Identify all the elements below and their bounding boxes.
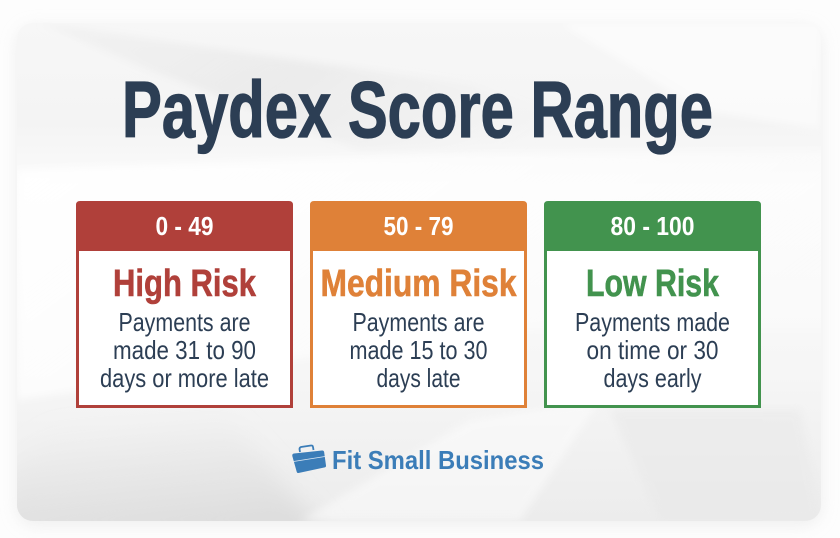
description [100,307,269,393]
description [575,307,730,393]
range header: 0 - 49 [76,201,293,251]
description: days or more late [100,363,269,393]
icon: briefcase [292,445,326,473]
description: made 15 to 30 [350,335,488,365]
logo: Fit Small Business [292,445,544,475]
heading: Medium Risk: Medium Risk [320,263,517,305]
description: days late [376,363,460,393]
range header: 50 - 79: 50 - 79 [384,211,454,241]
description: Payments are [118,307,250,337]
range header: 80 - 100: 80 - 100 [610,211,694,241]
panel: medium risk card [310,201,527,406]
description: days early [604,363,702,393]
range header: 50 - 79 [310,201,527,251]
panel: low risk card [544,201,761,406]
heading: Low Risk: Low Risk [586,263,720,305]
range header: 0 - 49: 0 - 49 [156,211,214,241]
description: on time or 30 [586,335,718,365]
description: Payments are [352,307,484,337]
description [350,307,488,393]
panel: high risk card [76,201,293,406]
description: made 31 to 90 [113,335,256,365]
heading: High Risk: High Risk [113,263,257,305]
wordmark: Fit Small Business [332,445,544,475]
description: Payments made [575,307,730,337]
range header: 80 - 100 [544,201,761,251]
